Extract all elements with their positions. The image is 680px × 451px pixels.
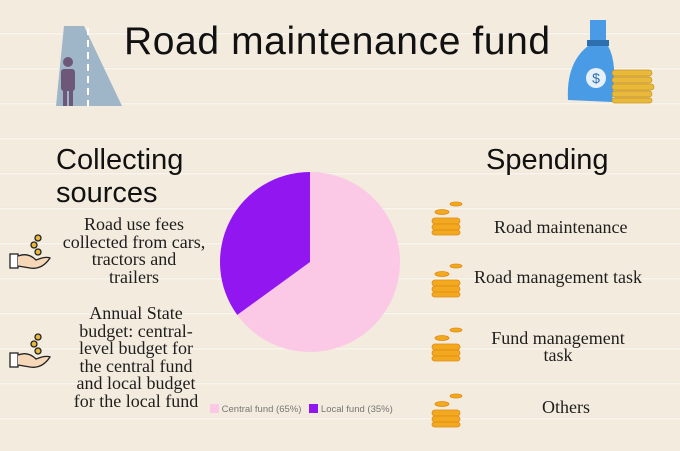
icon: road with person bbox=[56, 26, 122, 106]
heading: collecting sources: Collecting bbox=[56, 144, 183, 176]
text: tractors and bbox=[92, 249, 176, 269]
text: for the local fund bbox=[74, 390, 198, 410]
text: Road use fees bbox=[84, 214, 184, 234]
text bbox=[63, 214, 205, 286]
text: level budget for bbox=[79, 338, 193, 358]
text: the central fund bbox=[80, 356, 192, 376]
text: trailers bbox=[109, 266, 159, 286]
item: road management task: Road management task bbox=[474, 267, 642, 287]
item: others: Others bbox=[542, 397, 590, 417]
item: road maintenance: Road maintenance bbox=[494, 217, 627, 237]
icon: hand with coins bbox=[9, 234, 51, 269]
icon: money bag with coins bbox=[568, 20, 654, 104]
item: annual state budget bbox=[9, 303, 198, 410]
title: Road maintenance fund bbox=[124, 20, 551, 63]
text: collected from cars, bbox=[63, 232, 205, 252]
heading: spending: Spending bbox=[486, 144, 609, 176]
item: road use fees bbox=[9, 214, 205, 286]
heading: collecting sources bbox=[56, 144, 183, 209]
legend: Central fund (65%) Local fund (35%) bbox=[222, 404, 393, 415]
pie chart bbox=[220, 172, 400, 352]
item: fund management task: Fund management bbox=[491, 328, 625, 348]
icon: hand with coins bbox=[9, 333, 51, 368]
text: budget: central- bbox=[79, 320, 193, 340]
icon: money bag with coins: $ bbox=[592, 70, 600, 86]
text bbox=[74, 303, 198, 410]
item: road management task bbox=[432, 264, 642, 298]
text: and local budget bbox=[77, 373, 195, 393]
spending list bbox=[432, 202, 642, 428]
heading: collecting sources: sources bbox=[56, 177, 158, 209]
item: fund management task bbox=[432, 328, 625, 365]
item: road maintenance bbox=[432, 202, 627, 237]
item: others bbox=[432, 394, 590, 428]
text: Annual State bbox=[89, 303, 183, 323]
item: fund management task: task bbox=[544, 345, 572, 365]
